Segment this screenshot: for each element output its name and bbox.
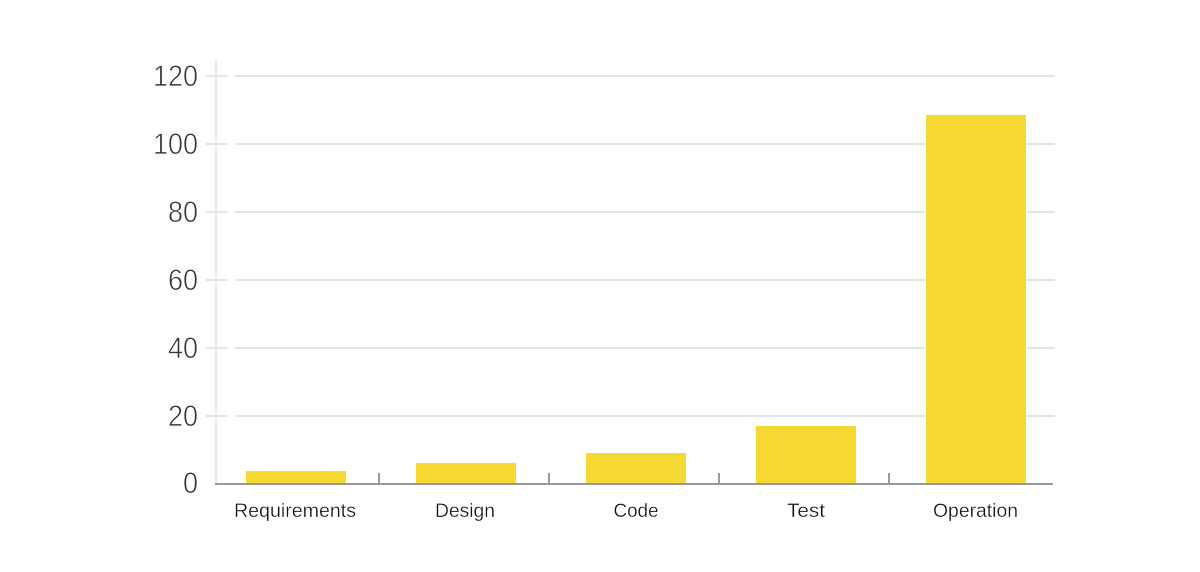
bar: Requirements <box>246 471 346 484</box>
y-axis labels: 120 <box>153 60 198 93</box>
bar: Code <box>586 453 686 484</box>
y-axis labels: 20 <box>168 400 198 433</box>
y-axis labels: 40 <box>168 332 198 365</box>
x-axis line and ticks <box>215 473 1053 485</box>
y-axis labels: 100 <box>153 128 198 161</box>
bar: Test <box>756 426 856 484</box>
x-axis labels <box>234 500 1018 522</box>
y-axis labels <box>153 60 198 500</box>
x-axis labels: Requirements <box>234 500 356 522</box>
x-axis labels: Operation <box>933 500 1018 522</box>
x-axis labels: Code <box>614 500 658 522</box>
bar: Operation <box>926 115 1026 484</box>
y-axis labels: 60 <box>168 264 198 297</box>
x-axis labels: Test <box>787 500 826 522</box>
bar: Design <box>416 463 516 484</box>
y-axis labels: 80 <box>168 196 198 229</box>
y-axis labels: 0 <box>183 467 198 500</box>
x-axis labels: Design <box>435 500 495 522</box>
bars <box>246 115 1026 484</box>
